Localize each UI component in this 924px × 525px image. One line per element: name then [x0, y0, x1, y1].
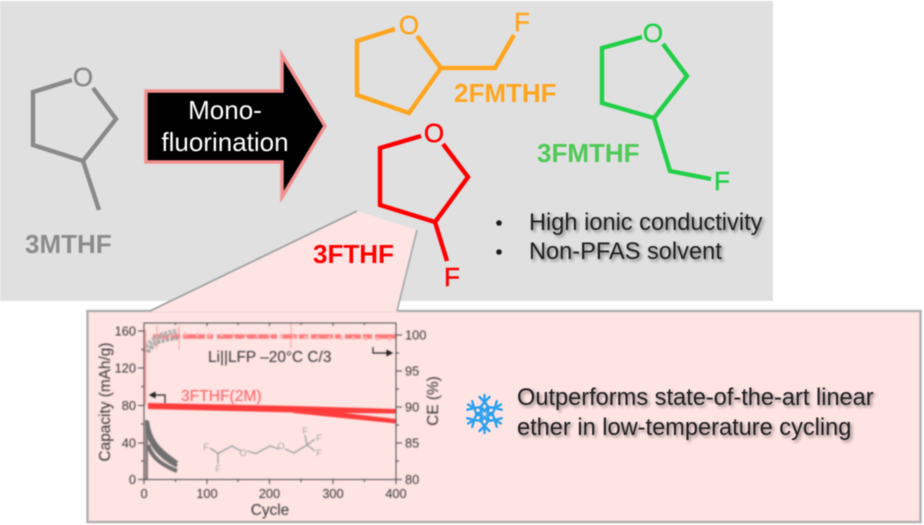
series label: 3FTHF(2M): 3FTHF(2M): [181, 388, 262, 405]
arrow: capacity axis pointer: [150, 392, 165, 403]
label: 3FMTHF: 3FMTHF: [537, 138, 640, 168]
linear ether molecule structure: F: [316, 448, 322, 458]
axis title: cycle: Cycle: [251, 502, 289, 519]
left axis labels: 160: [115, 324, 136, 338]
text block: low-temperature cycling claim: [517, 385, 874, 441]
right axis labels: [405, 328, 426, 487]
bottom axis labels: 100: [196, 486, 218, 501]
icon: snowflake: [466, 395, 503, 433]
axis title: capacity: Capacity (mAh/g): [97, 343, 114, 461]
arrow: mono-fluorination: Mono-: [188, 95, 262, 125]
label: 3FTHF: 3FTHF: [313, 239, 394, 269]
chart condition label: Li||LFP –20°C C/3: [208, 349, 331, 366]
linear ether molecule structure: [203, 426, 322, 474]
right axis labels: 85: [405, 436, 419, 450]
linear ether molecule structure: O: [239, 448, 247, 458]
capacity curves: 3FTHF(2M): [146, 330, 396, 424]
molecule: 2FMTHF: F: [514, 7, 530, 37]
CE data points: [146, 323, 396, 352]
linear ether molecule structure: O: [277, 441, 285, 451]
chart: capacity and CE versus cycle: [97, 323, 442, 519]
text block: solvent properties: High ionic conductivity: [529, 210, 763, 236]
molecule: 2FMTHF: O: [399, 10, 419, 40]
molecule: 3FTHF: O: [424, 118, 444, 148]
text block: low-temperature cycling claim: ether in low-temperature cycling: [517, 415, 851, 441]
text block: low-temperature cycling claim: Outperforms state-of-the-art linear: [517, 385, 874, 411]
right axis labels: 90: [405, 400, 419, 414]
bottom axis labels: 300: [322, 486, 344, 501]
linear ether molecule structure: F: [316, 433, 322, 443]
linear ether molecule structure: F: [302, 426, 308, 436]
molecule: 3MTHF: [25, 62, 116, 259]
panel: pink results box with callout: [88, 211, 920, 522]
right axis labels: 100: [405, 328, 426, 342]
axes frame: [138, 323, 402, 484]
right axis labels: 95: [405, 364, 419, 378]
label: 2FMTHF: 2FMTHF: [454, 78, 557, 108]
arrow: mono-fluorination: [146, 55, 325, 197]
linear ether molecule structure: F: [215, 464, 221, 474]
linear ether molecule structure: F: [203, 442, 209, 452]
bottom axis labels: [140, 486, 407, 501]
arrow: CE axis pointer: [373, 347, 392, 356]
molecule: 3FMTHF: F: [714, 166, 730, 196]
text block: solvent properties: [496, 210, 763, 265]
label: 3MTHF: 3MTHF: [25, 229, 112, 259]
panel: grey molecule background: [0, 1, 773, 301]
molecule: 3FMTHF: O: [643, 18, 663, 48]
axis title: CE: CE (%): [425, 376, 442, 426]
bottom axis labels: 400: [385, 486, 407, 501]
left axis labels: 40: [122, 436, 136, 450]
bottom axis labels: 0: [140, 486, 148, 501]
molecule: 3FTHF: [313, 118, 468, 292]
molecule: 3FTHF: F: [444, 262, 460, 292]
bottom axis labels: 200: [259, 486, 280, 501]
right axis labels: 80: [405, 472, 419, 487]
arrow: mono-fluorination: fluorination: [161, 127, 289, 157]
molecule: 3MTHF: O: [73, 62, 93, 92]
left axis labels: [115, 324, 136, 487]
left axis labels: 0: [129, 472, 136, 487]
molecule: 2FMTHF: [357, 7, 557, 113]
capacity curves: linear ether: [146, 420, 177, 479]
left axis labels: 80: [122, 398, 136, 413]
left axis labels: 120: [115, 360, 136, 376]
molecule: 3FMTHF: [537, 18, 730, 196]
text block: solvent properties: Non-PFAS solvent: [529, 239, 722, 265]
